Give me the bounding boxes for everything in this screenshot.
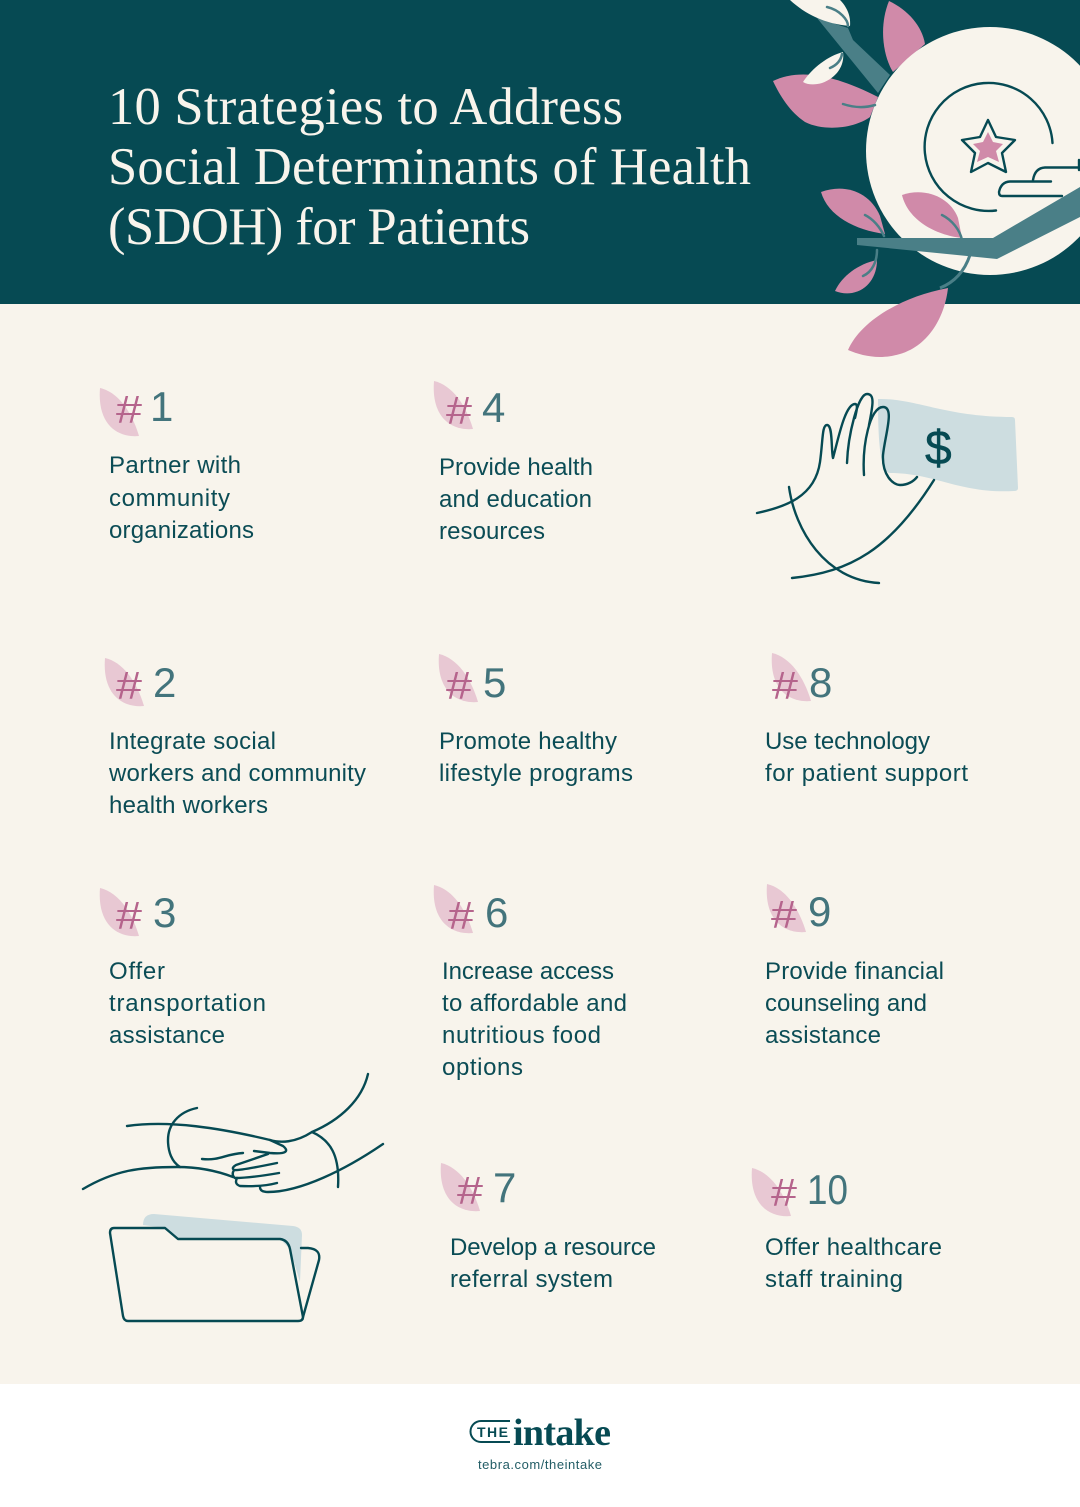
strategy 3: 3 bbox=[153, 889, 176, 936]
strategy 6: Increase access bbox=[442, 958, 614, 985]
strategy 7 bbox=[441, 1163, 656, 1293]
strategy 7: 7 bbox=[493, 1164, 516, 1211]
strategy 6: # bbox=[448, 895, 474, 938]
logo: THE bbox=[477, 1424, 508, 1440]
strategy 3 bbox=[100, 888, 266, 1049]
strategy 1 bbox=[100, 383, 254, 544]
illustration: hand with dollar bill: $ bbox=[925, 422, 952, 475]
strategy 1: Partner with bbox=[109, 452, 241, 479]
strategy 10: 10 bbox=[807, 1166, 848, 1213]
strategy 6: to affordable and bbox=[442, 990, 627, 1017]
strategy 2 bbox=[105, 658, 366, 819]
footer url: tebra.com/theintake bbox=[478, 1457, 602, 1472]
strategy 5: # bbox=[446, 665, 472, 708]
logo bbox=[470, 1412, 611, 1454]
strategy 8 bbox=[765, 653, 968, 787]
strategy 6: nutritious food bbox=[442, 1022, 601, 1049]
illustration: handshake bbox=[83, 1074, 383, 1192]
strategy 5: 5 bbox=[483, 659, 506, 706]
strategy 10: Offer healthcare bbox=[765, 1234, 942, 1261]
strategy 2: health workers bbox=[109, 792, 268, 819]
strategy 7: referral system bbox=[450, 1266, 613, 1293]
strategy 6: 6 bbox=[485, 889, 508, 936]
title: (SDOH) for Patients bbox=[108, 198, 530, 256]
strategy 5 bbox=[439, 654, 633, 787]
strategy 4 bbox=[434, 381, 593, 545]
strategy 1: organizations bbox=[109, 517, 254, 544]
strategy 9: Provide financial bbox=[765, 958, 944, 985]
strategy 10: staff training bbox=[765, 1266, 903, 1293]
strategy 4: and education bbox=[439, 486, 592, 513]
strategy 8: Use technology bbox=[765, 728, 930, 755]
illustration: folder bbox=[110, 1214, 319, 1321]
strategy 4: Provide health bbox=[439, 454, 593, 481]
strategy 10: # bbox=[771, 1172, 797, 1215]
strategy 2: Integrate social bbox=[109, 728, 276, 755]
strategy 9: # bbox=[771, 894, 797, 937]
strategy 4: 4 bbox=[482, 384, 505, 431]
strategy 3: transportation bbox=[109, 990, 266, 1017]
strategy 2: 2 bbox=[153, 659, 176, 706]
strategy 8: 8 bbox=[809, 659, 832, 706]
strategy 9: counseling and bbox=[765, 990, 927, 1017]
title: Social Determinants of Health bbox=[108, 138, 751, 196]
strategy 1: 1 bbox=[150, 383, 173, 430]
strategy 6 bbox=[434, 885, 627, 1081]
strategy 4: resources bbox=[439, 518, 545, 545]
strategy 2: workers and community bbox=[108, 760, 366, 787]
strategy 3: Offer bbox=[109, 958, 165, 985]
logo: intake bbox=[513, 1412, 611, 1454]
header band bbox=[0, 0, 1080, 304]
strategy 2: # bbox=[116, 665, 142, 708]
strategy 1: community bbox=[109, 485, 230, 512]
strategy 7: Develop a resource bbox=[450, 1234, 656, 1261]
strategy 10 bbox=[752, 1166, 942, 1293]
title bbox=[108, 78, 751, 256]
strategy 7: # bbox=[457, 1170, 483, 1213]
strategy 3: assistance bbox=[109, 1022, 225, 1049]
strategy 5: Promote healthy bbox=[439, 728, 617, 755]
strategy 1: # bbox=[116, 389, 142, 432]
strategy 8: # bbox=[772, 665, 798, 708]
strategy 6: options bbox=[442, 1054, 523, 1081]
illustration: star in hand with leaves bbox=[773, 0, 1080, 357]
strategy 9: assistance bbox=[765, 1022, 881, 1049]
footer band bbox=[0, 1384, 1080, 1507]
title: 10 Strategies to Address bbox=[108, 78, 623, 136]
strategy 8: for patient support bbox=[765, 760, 968, 787]
strategy 3: # bbox=[116, 895, 142, 938]
strategy 5: lifestyle programs bbox=[439, 760, 633, 787]
illustration: hand with dollar bill bbox=[757, 394, 1018, 583]
strategy 9 bbox=[765, 884, 944, 1049]
strategy 4: # bbox=[446, 390, 472, 433]
strategy 9: 9 bbox=[808, 888, 831, 935]
